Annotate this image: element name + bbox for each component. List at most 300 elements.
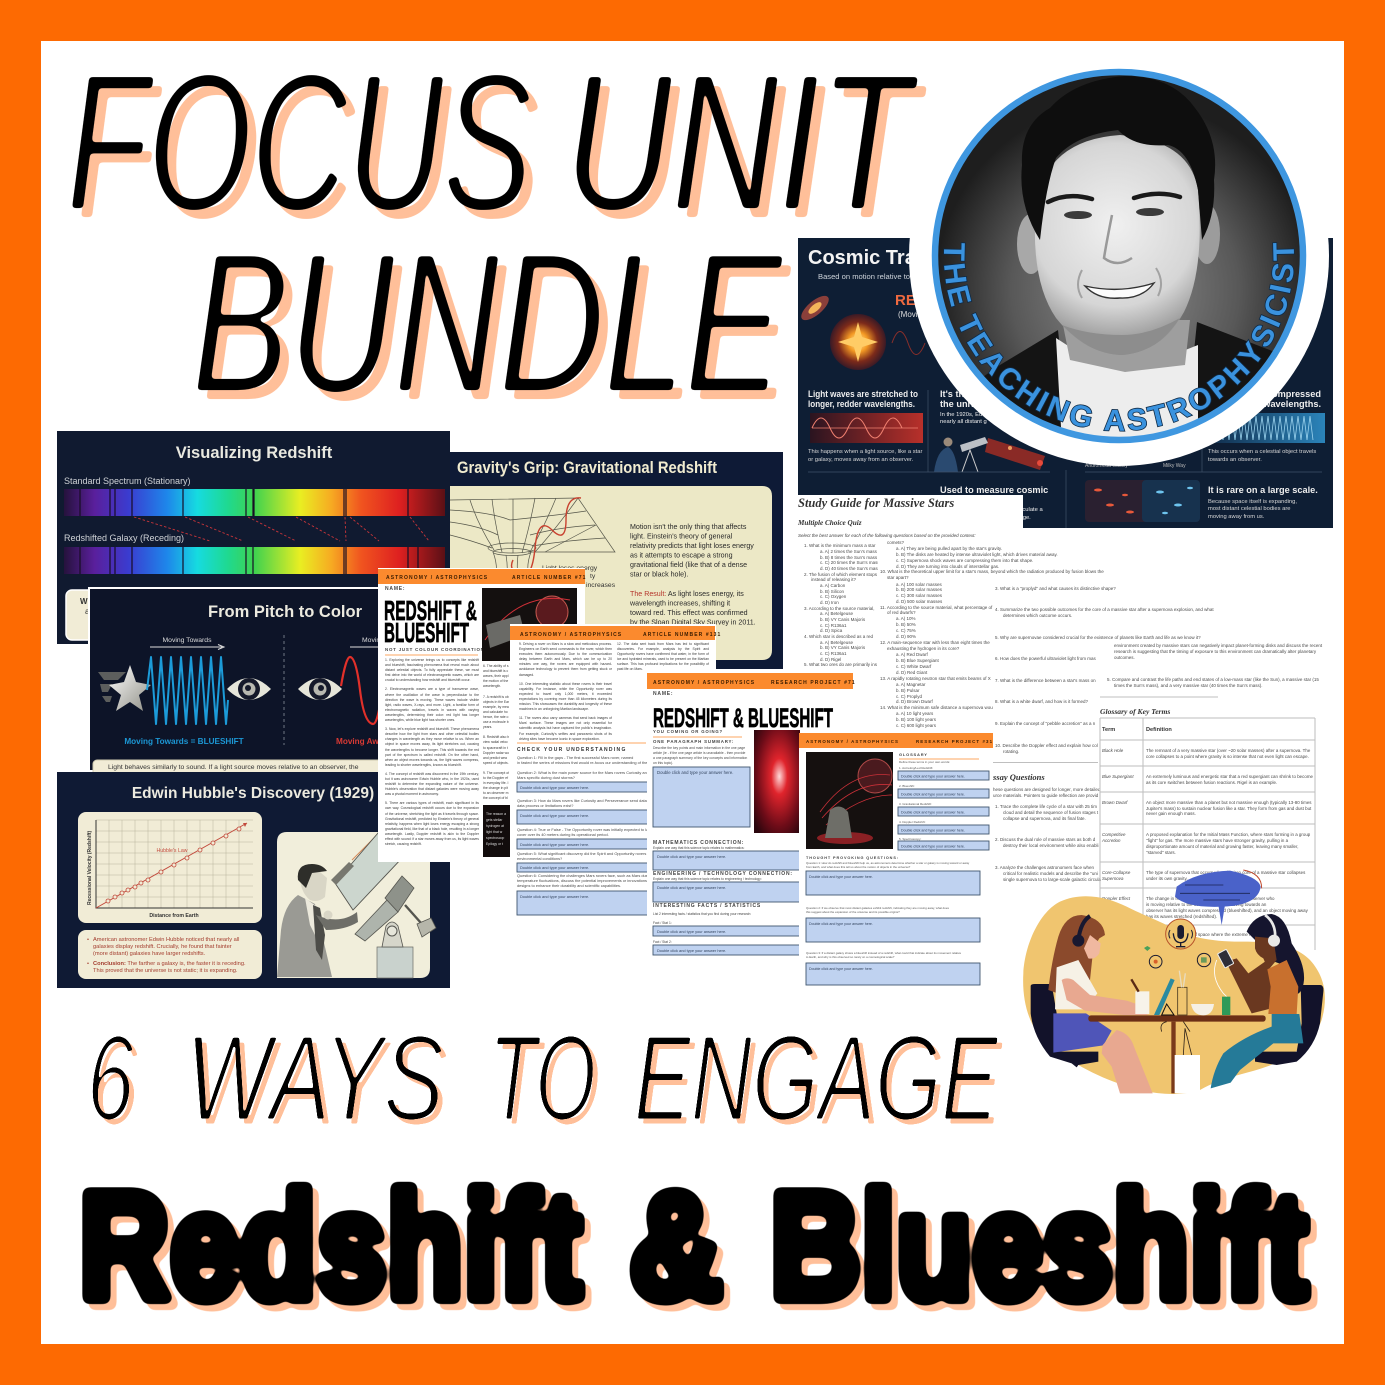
glossary answer boxes: Double click and type your answer here. bbox=[901, 792, 965, 796]
understanding questions: data process or limitations exist? bbox=[517, 803, 574, 808]
article text column 1: 9. Driving a rover on Mars is a slow and meticulous process. Engineers on Earth send commands to the rover, which then executes them autonomously. Due to the communication delay between Earth and Mars, which can be up to 20 minutes one way, the rovers are equipped with hazard-avoidance technology to prevent them from getting stuck or damaged. bbox=[519, 642, 612, 677]
quiz column 2: 11. According to the source material, what percentage of bbox=[880, 605, 993, 610]
understanding questions: Question 2: What is the main power source for the Mars rovers Curiosity and Perseverance and bbox=[517, 770, 682, 775]
illustration: two women listening to a podcast bbox=[1023, 870, 1325, 1094]
panel: study guide for massive stars bbox=[797, 495, 1323, 950]
gravity explanation text: Motion isn't the only thing that affects bbox=[630, 523, 747, 531]
funnel caption: ty bbox=[590, 573, 596, 580]
section: one paragraph summary: a one paragraph summary of the key concepts and information bbox=[653, 756, 747, 760]
thought questions: Question 1: How do redshift and blueshift help us, as astronomers determine whether a star or galaxy is moving toward or away bbox=[806, 861, 970, 865]
text: stretched waves: Light waves are stretched to bbox=[808, 389, 918, 399]
second text column: waves, their appl bbox=[483, 674, 508, 678]
answer boxes bbox=[517, 782, 652, 915]
text: it's the universe: In the 1920s, Ed bbox=[940, 412, 982, 418]
answer boxes: Double click and type your answer here. bbox=[520, 865, 589, 870]
heading: 6 ways to engage: WAYS bbox=[186, 1010, 444, 1146]
text: redshift occurs: or galaxy, moves away from an observer. bbox=[808, 457, 914, 463]
second text column: Doppler radar wo bbox=[483, 751, 509, 755]
page 2 continuation: times the Sun's mass), and a very massive star (40 times the Sun's mass). bbox=[1114, 683, 1263, 688]
chart: hubble's law bbox=[78, 812, 262, 923]
text: redshift occurs: This happens when a light source, like a star bbox=[808, 449, 922, 455]
short answer and essay column: 1. Trace the complete life cycle of a star with 25 tim bbox=[995, 804, 1097, 809]
heading: focus unit: UNIT bbox=[565, 33, 919, 252]
quiz column 2: star apart? bbox=[887, 575, 909, 580]
section: engineering connection: Explain one way that this science topic relates to engineering / technology: bbox=[653, 877, 762, 881]
orange header bbox=[799, 733, 993, 748]
icon: microphone bbox=[1166, 919, 1196, 949]
heading: 6 ways to engage: 6 bbox=[92, 1015, 139, 1151]
label: redshift column: REDSHIFT bbox=[895, 292, 970, 309]
understanding questions: Question 5: What significant discovery did the Spirit and Opportunity rovers make about Mars' bbox=[517, 851, 678, 856]
text: blueshift compressed bbox=[1191, 389, 1321, 409]
text: stretched waves: longer, redder wavelengths. bbox=[808, 399, 915, 409]
short answer and essay column: rotating. bbox=[1003, 749, 1019, 754]
thought questions: from Earth, and what does this tell us about the motion of objects in the universe? bbox=[806, 865, 911, 869]
shorts bbox=[1053, 1013, 1112, 1053]
understanding questions: temperature fluctuations, discuss the potential improvements or innovations that could be made in bbox=[517, 878, 685, 883]
heading: 6 ways to engage: TO bbox=[489, 1010, 596, 1146]
table and objects bbox=[1088, 971, 1266, 1093]
second text column: to the Doppler ef bbox=[483, 776, 508, 780]
answer boxes: Double click and type your answer here. bbox=[520, 813, 589, 818]
quiz column 1: b. B) VY Canis Majoris bbox=[820, 617, 866, 622]
quiz column 2: exhausting the hydrogen in its core? bbox=[887, 646, 960, 651]
short answer and essay column: 3. What is a "proplyd" and what causes its distinctive shape? bbox=[995, 586, 1116, 591]
thought questions: to Earth, and why is this observed so rarely on a cosmological scale? bbox=[806, 955, 895, 959]
understanding questions: Question 4: True or False - The Opportunity rover was initially expected to last 90 days but bbox=[517, 827, 673, 832]
nose bbox=[1104, 215, 1132, 263]
quiz column 2: d. D) Red Giant bbox=[896, 670, 928, 675]
quiz column 2: a. A) 100 solar masses bbox=[896, 582, 943, 587]
article text column 2: 12. The data sent back from Mars has led to significant discoveries. For example, analysis by the Spirit and Opportunity rovers have confirmed that water, in the form of ice and hydrated minerals, used to be present on the Martian surface. This has profound implications for the possibility of past life on Mars. bbox=[617, 642, 709, 671]
quiz column 2: b. B) Pulsar bbox=[896, 688, 920, 693]
label: redshifted galaxy: Redshifted Galaxy (Receding) bbox=[64, 533, 184, 543]
thought questions: Question 2: If we observe that most distant galaxies exhibit redshift, indicating they are moving away, what does bbox=[806, 906, 950, 910]
heading: focus unit: UNIT bbox=[574, 42, 928, 261]
text: it's the universe bbox=[940, 389, 987, 425]
understanding questions: environmental conditions? bbox=[517, 856, 563, 861]
glossary table: Black Hole bbox=[1102, 748, 1124, 753]
quiz column 2: b. B) Blue Supergiant bbox=[896, 658, 940, 663]
galaxy labels bbox=[1085, 463, 1186, 469]
hubble text card: (more distant) galaxies have larger redshifts. bbox=[93, 951, 206, 957]
section: interesting facts: List 2 interesting facts / statistics that you find during your research: bbox=[653, 912, 751, 916]
quiz column 1: c. C) Oxygen bbox=[820, 594, 847, 599]
second text column: wavelength. bbox=[483, 684, 501, 688]
glossary answer boxes: Double click and type your answer here. bbox=[901, 774, 965, 778]
subtitle: Based on motion relative to us bbox=[818, 272, 920, 281]
glossary table: disproportionate amount of material and growing faster, leaving many smaller, bbox=[1146, 844, 1298, 849]
second text column: objects in the Ear bbox=[483, 700, 509, 704]
label and arrow: moving towards bbox=[150, 637, 224, 650]
second text column: use a molecule b bbox=[483, 720, 509, 724]
heading: 6 ways to engage: TO bbox=[494, 1015, 601, 1151]
dark fact box: spectroscop bbox=[486, 836, 504, 840]
quiz column 2 cover bbox=[878, 538, 882, 738]
section: mathematics connection: Explain one way that this science topic relates to mathematics: bbox=[653, 846, 745, 850]
glossary answer boxes: Double click and type your answer here. bbox=[901, 810, 965, 814]
quiz column 1: c. C) 20 times the Sun's mass bbox=[820, 560, 880, 565]
orange rule bbox=[517, 742, 646, 744]
second text column: to spacecraft in t bbox=[483, 746, 508, 750]
heading: bundle: BUNDLE bbox=[192, 212, 784, 435]
spectrum: stationary bbox=[64, 489, 445, 516]
section: engineering connection: Double click and type your answer here. bbox=[657, 885, 726, 890]
orange header: RESEARCH PROJECT #31 bbox=[916, 739, 993, 744]
funnel caption: Light loses energy bbox=[542, 565, 598, 572]
quiz column 2: a. A) 10 light years bbox=[896, 711, 934, 716]
text: blueshift compressed: to shorter, bluer wavelengths. bbox=[1191, 399, 1321, 409]
hair bbox=[1048, 915, 1105, 997]
glossary table: Accretion bbox=[1101, 838, 1121, 843]
orange header: ARTICLE NUMBER #71 bbox=[512, 575, 587, 581]
label: moving away: Moving Away bbox=[362, 637, 403, 644]
section: one paragraph summary: Describe the key points and main information in the one page bbox=[653, 746, 745, 750]
glossary table: core collapses to a point where gravity is so intense that not even light can escape. bbox=[1146, 754, 1309, 759]
phone bbox=[1217, 949, 1234, 968]
worksheet title: REDSHIFT & bbox=[384, 595, 477, 626]
infographic title: Cosmic Traffic bbox=[808, 247, 946, 269]
heading: redshift and blueshift: & bbox=[629, 1161, 723, 1331]
second text column bbox=[483, 664, 509, 804]
heading: redshift and blueshift bbox=[79, 1161, 1314, 1337]
glossary heading: GLOSSARY bbox=[899, 752, 928, 757]
dark fact box: The reason a bbox=[486, 812, 506, 816]
worksheet: article number 71 bbox=[378, 568, 587, 862]
quiz column 1: a. A) Carbon bbox=[820, 583, 846, 588]
glossary table: "fight" for gas. The more massive stars have stronger gravity, pulling in a bbox=[1146, 838, 1289, 843]
text: rare on a large scale bbox=[1208, 485, 1318, 520]
label: standard spectrum: Standard Spectrum (Stationary) bbox=[64, 476, 191, 486]
answer boxes: Double click and type your answer here. bbox=[520, 842, 589, 847]
glossary table: The remnant of a very massive star (over ~20 solar masses) after a supernova. The bbox=[1146, 748, 1311, 753]
image: red light burst bbox=[754, 730, 800, 833]
text: used to measure cosmic bbox=[940, 485, 1048, 521]
article text column 1: 11. The rovers also carry cameras that send back images of Mars' surface. These images are not only essential for scientific analysis but have captured the public's imagination. For example, Curiosity's selfies and panoramic shots of its driving sites have become iconic in space exploration. bbox=[519, 716, 612, 741]
gravity explanation text bbox=[629, 523, 756, 626]
glossary table: is moving relative to the source. An object moving towards an bbox=[1146, 902, 1267, 907]
icon: galaxy bbox=[797, 292, 833, 324]
hubble text card: Conclusion: The farther a galaxy is, the faster it is receding. bbox=[93, 961, 246, 967]
gravity explanation text: light. Einstein's theory of general bbox=[630, 532, 733, 540]
woman on left bbox=[1048, 915, 1153, 1093]
orange header: ASTRONOMY / ASTROPHYSICS bbox=[806, 739, 899, 744]
hubble text card: galaxies display redshift. Crucially, he found that fainter bbox=[93, 944, 232, 950]
eyes bbox=[1064, 208, 1164, 219]
short answer and essay column: destroy their local environment while also enabli bbox=[1003, 843, 1099, 848]
worksheet title: BLUESHIFT bbox=[384, 617, 469, 648]
orange rule bbox=[653, 736, 742, 738]
glossary table: Core-Collapse bbox=[1102, 870, 1131, 875]
heading: bundle: BUNDLE bbox=[201, 221, 793, 444]
hubble text card bbox=[78, 930, 262, 979]
quiz column 1: b. B) VY Canis Majoris bbox=[820, 645, 866, 650]
short answer and essay column: 4. Summarize the two possible outcomes for the core of a massive star after a supernova explosion, and what bbox=[995, 607, 1214, 612]
second text column: 9. The concept of bbox=[483, 771, 509, 775]
hubble text card: • bbox=[87, 937, 89, 943]
label: moving away bbox=[350, 637, 403, 647]
icon: exploding star bbox=[830, 314, 886, 370]
glossary answer boxes: 2. Blueshift: bbox=[899, 784, 915, 788]
second text column: example, by mea bbox=[483, 705, 509, 709]
smile bbox=[1085, 283, 1154, 298]
understanding questions bbox=[517, 755, 685, 888]
quiz column 2: b. B) The disks are heated by intense ultraviolet light, which drives material away. bbox=[896, 552, 1058, 557]
heading: redshift and blueshift: & bbox=[635, 1167, 729, 1337]
blue ring bbox=[935, 72, 1303, 440]
face bbox=[1084, 935, 1101, 959]
section: one paragraph summary: ONE PARAGRAPH SUMMARY: bbox=[653, 739, 734, 744]
orange header bbox=[510, 626, 721, 640]
panel: gravity's grip slide bbox=[450, 452, 783, 669]
glossary table: Term bbox=[1102, 727, 1115, 733]
woman on right bbox=[1211, 914, 1304, 1088]
glossary answer boxes: 4. Doppler Redshift: bbox=[899, 820, 926, 824]
quiz column 1: c. C) R136a1 bbox=[820, 623, 847, 628]
worksheet: research project 31 bbox=[799, 733, 993, 992]
funnel caption: increases bbox=[586, 582, 616, 589]
short answer and essay column: 7. What is the difference between a star's mass on bbox=[995, 678, 1096, 683]
glossary table: Brown Dwarf bbox=[1102, 800, 1128, 805]
thought answer boxes: Double click and type your answer here. bbox=[809, 922, 873, 926]
heading: thought provoking questions: THOUGHT PROVOKING QUESTIONS: bbox=[806, 856, 899, 860]
illustration: hubble at telescope bbox=[277, 832, 436, 978]
label: redshift column bbox=[895, 292, 970, 319]
quiz column 2: c. C) White Dwarf bbox=[896, 664, 932, 669]
panel: visualizing redshift slide bbox=[57, 431, 450, 644]
curved name text: THE TEACHING ASTROPHYSICIST bbox=[943, 242, 1295, 432]
slide title: Visualizing Redshift bbox=[176, 444, 333, 462]
glossary table: under its own gravity. bbox=[1146, 876, 1188, 881]
heading: focus unit: FOCUS bbox=[76, 42, 541, 261]
text: rare on a large scale: It is rare on a large scale. bbox=[1208, 485, 1318, 495]
orange header bbox=[378, 569, 587, 584]
blue wave box bbox=[1215, 413, 1325, 443]
page 2 continuation bbox=[1107, 643, 1323, 688]
quiz column 2: of red dwarfs? bbox=[887, 610, 916, 615]
dashed divider bbox=[283, 635, 285, 745]
left chair bbox=[1031, 984, 1098, 1067]
short answer and essay column: 3. Analyze the challenges astronomers face when bbox=[995, 865, 1095, 870]
understanding questions: in fasted the series of missions that would re-focus our understanding of the red planet bbox=[517, 760, 667, 765]
understanding questions: Question 6: Considering the challenges Mars rovers face, such as Mars dust storms and extreme bbox=[517, 873, 684, 878]
glossary table: has its waves stretched (redshifted). bbox=[1146, 914, 1217, 919]
label: redshift column: (Moving Away) bbox=[898, 310, 951, 319]
page 2 continuation: 5. Compare and contrast the life paths and end states of a low-mass star (like the Sun), a massive star (15 bbox=[1107, 677, 1319, 682]
neck bbox=[1062, 320, 1190, 372]
quiz column 1: c. C) R136a1 bbox=[820, 651, 847, 656]
gravity explanation text: as it attempts to escape a strong bbox=[630, 552, 733, 560]
quiz column 2: a. A) Red Dwarf bbox=[896, 652, 929, 657]
quiz column 2: d. D) They are turning into clouds of interstellar gas. bbox=[896, 564, 999, 569]
gravity explanation text: gravitational field (like that of a dense bbox=[630, 561, 747, 569]
speech bubble bbox=[1175, 870, 1262, 925]
glossary table: Jupiter's mass) to sustain nuclear fusion like a star. They form from gas and dust but bbox=[1146, 806, 1312, 811]
section: engineering connection bbox=[653, 871, 803, 902]
second text column: view radial veloc bbox=[483, 740, 508, 744]
subheading: multiple choice quiz: Multiple Choice Quiz bbox=[797, 519, 862, 527]
article text column bbox=[385, 658, 479, 858]
second text column: to an observer m bbox=[483, 791, 508, 795]
dark fact box: Epilogy or t bbox=[486, 842, 503, 846]
worksheet subtitle: YOU COMING OR GOING? bbox=[653, 729, 723, 734]
hubble text card: This proved that the universe is not static; it is expanding. bbox=[93, 968, 238, 974]
heading: focus unit: FOCUS bbox=[67, 33, 532, 252]
teal jeans bbox=[1211, 1014, 1303, 1088]
icon: eye observer bbox=[298, 678, 342, 700]
glossary heading bbox=[899, 752, 979, 764]
glossary table: Doppler Effect bbox=[1102, 896, 1131, 901]
section: engineering connection: ENGINEERING / TECHNOLOGY CONNECTION: bbox=[653, 871, 793, 877]
gravity explanation text: star or black hole). bbox=[630, 570, 688, 578]
cheek lines bbox=[1078, 268, 1161, 298]
glossary table: The type of supernova that occurs when the iron core of a massive star collapses bbox=[1146, 870, 1306, 875]
ears bbox=[1017, 214, 1038, 274]
heading: redshift and blueshift: Redshift bbox=[79, 1161, 582, 1331]
gravity explanation text: toward red. This effect was confirmed bbox=[630, 609, 748, 617]
short answer and essay column: urce materials. Pointers to guide reflection are provid bbox=[993, 793, 1099, 798]
second text column: speed of objects. bbox=[483, 761, 509, 765]
section: interesting facts: Fact / Stat 2: bbox=[653, 940, 672, 944]
article text column: 2. Electromagnetic waves are a type of transverse wave, where the oscillation of the wave is perpendicular to the direction the wave is moving. These waves include visible light, radio waves, X-rays, and more. Light, a familiar form of electromagnetic radiation, travels in waves with varying wavelengths, determining their color: red light has longer wavelengths, while blue light has shorter ones. bbox=[385, 687, 479, 722]
quiz column 2: d. D) 90% bbox=[896, 634, 916, 639]
eyebrows bbox=[1048, 194, 1180, 202]
thought questions bbox=[806, 861, 970, 959]
article text column: 4. The concept of redshift was discovered in the 19th century, but it was astronomer Edwin Hubble who, in the 1920s, used redshift to determine the expanding nature of the universe. Hubble's observation that distant galaxies were moving away was a pivotal moment in astronomy. bbox=[385, 772, 479, 796]
article text column: 1. Exploring the universe brings us to concepts like redshift and blueshift, fascinating phenomena that reveal much about distant celestial objects. To fully appreciate these, we must first delve into the world of electromagnetic waves, which are crucial to understanding how redshift and blueshift occur. bbox=[385, 658, 479, 682]
text: rare on a large scale: most distant celestial bodies are bbox=[1208, 506, 1290, 512]
worksheet: research project 71 bbox=[647, 673, 856, 991]
text: redshift occurs bbox=[808, 449, 922, 463]
red light path bbox=[512, 498, 581, 576]
quiz column 1: d. D) Rigel bbox=[820, 657, 841, 662]
earphone cable bbox=[1214, 960, 1227, 997]
quiz column 1: 1. What is the minimum mass a star bbox=[804, 543, 876, 548]
text: blueshift occurs: This occurs when a celestial object travels bbox=[1208, 449, 1316, 455]
headphones bbox=[1078, 916, 1090, 940]
image: telescope and planet bbox=[806, 752, 893, 849]
glossary table: Habitable Zone, a zone of space where the extreme radiation from the bbox=[1146, 932, 1284, 937]
galaxy labels: Andromeda Galaxy bbox=[1085, 463, 1128, 469]
glossary table: Definition bbox=[1146, 727, 1172, 733]
icon: moving star bbox=[98, 665, 151, 711]
dark fact box: gets stellar bbox=[486, 818, 503, 822]
section: interesting facts bbox=[653, 903, 803, 955]
orange header: RESEARCH PROJECT #71 bbox=[771, 680, 856, 686]
page 2 continuation: research is suggesting that the timing of exposure to this environment can dramatically alter planetary bbox=[1114, 649, 1317, 654]
subheading: glossary of key terms: Glossary of Key Terms bbox=[1100, 707, 1170, 716]
section: one paragraph summary: on this topic). bbox=[653, 761, 673, 765]
arm bbox=[1062, 978, 1149, 1015]
worksheet subtitle: NOT JUST COLOUR COORDINATION bbox=[385, 647, 485, 652]
quiz column 1: b. B) Silicon bbox=[820, 589, 845, 594]
understanding questions: Question 3: How do Mars rovers like Curiosity and Perseverance send data back to Earth and bbox=[517, 798, 678, 803]
glossary answer boxes: 1. Accreting/Led Redshift: bbox=[899, 766, 933, 770]
short answer and essay column: 8. What is a white dwarf, and how is it formed? bbox=[995, 699, 1089, 704]
heading: 6 ways to engage: ENGAGE bbox=[634, 1010, 999, 1146]
text: it's the universe: It's the bbox=[940, 389, 969, 399]
text: it's the universe: nearly all distant g bbox=[940, 419, 987, 425]
quiz column 1: a. A) Betelgeuse bbox=[820, 611, 854, 616]
quiz column 1: a. A) Betelgeuse bbox=[820, 640, 854, 645]
quiz column 2: a. A) 10% bbox=[896, 616, 916, 621]
quiz column 2: c. C) 300 solar masses bbox=[896, 593, 943, 598]
glossary table: Blue Supergiant bbox=[1102, 774, 1134, 779]
dividers bbox=[808, 390, 1322, 528]
dark fact box: light that w bbox=[486, 830, 503, 834]
orange header: ASTRONOMY / ASTROPHYSICS bbox=[520, 632, 622, 638]
quiz column 1: instead of releasing it? bbox=[811, 577, 857, 582]
image: telescope and planet bbox=[482, 588, 577, 661]
slide title: Gravity's Grip: Gravitational Redshift bbox=[457, 458, 717, 477]
quiz column 2: d. D) 500 solar masses bbox=[896, 599, 943, 604]
glossary table: as its core switches between fusion reactions. Rigel is an example. bbox=[1146, 780, 1277, 785]
quiz column 2: c. C) Proplyd bbox=[896, 694, 923, 699]
orange header: ASTRONOMY / ASTROPHYSICS bbox=[386, 575, 488, 581]
section: interesting facts: Double click and type your answer here. bbox=[657, 929, 726, 934]
icon: eye bbox=[227, 678, 271, 700]
shirt bbox=[1056, 338, 1198, 445]
quiz column 2: a. A) They are being pulled apart by the star's gravity. bbox=[896, 546, 1002, 551]
quiz column 1: 5. What two ores do are primarily ins bbox=[804, 662, 878, 667]
glossary table: "starved" stars. bbox=[1146, 850, 1176, 855]
thought answer boxes bbox=[806, 871, 980, 985]
glossary heading: Define these terms in your own words: bbox=[899, 760, 950, 764]
page 2 continuation: outcomes. bbox=[1114, 655, 1135, 660]
glossary table: The change in frequency of a wave in relation to an observer who bbox=[1146, 896, 1275, 901]
thought questions: this suggest about the expansion of the universe and its possible origins? bbox=[806, 910, 900, 914]
quiz column 1: 2. The fusion of which element stops bbox=[804, 572, 878, 577]
answer boxes: Double click and type your answer here. bbox=[520, 785, 589, 790]
info box: Light behaves similarly to sound. If a light source moves relative to an observer, the bbox=[108, 764, 359, 771]
article text column: 5. There are various types of redshift, each significant in its own way. Cosmological redshift occurs due to the expansion of the universe, stretching the light as it travels through space. Gravitational redshift, predicted by Einstein's theory of general relativity, happens when light loses energy escaping a strong gravitational field, like that of a black hole, resulting in a longer wavelength. Lastly, Doppler redshift is akin to the Doppler effect with sound: if a star moves away from us, its light waves stretch, causing redshift. bbox=[385, 801, 479, 846]
quiz column 2: b. B) 50% bbox=[896, 622, 916, 627]
short answer and essay column: 10. Describe the Doppler effect and explain how col bbox=[995, 743, 1098, 748]
panel: edwin hubble's discovery slide bbox=[57, 772, 450, 988]
red wave box bbox=[810, 413, 923, 443]
leg bbox=[1102, 1030, 1153, 1093]
quiz column 2: c. C) Supernova shock waves are compressing them into that shape. bbox=[896, 558, 1033, 563]
spacetime funnel diagram bbox=[450, 498, 615, 600]
thought answer boxes: Double click and type your answer here. bbox=[809, 875, 873, 879]
slide title: Edwin Hubble's Discovery (1929) bbox=[132, 785, 374, 802]
name field: NAME: bbox=[385, 586, 405, 592]
quiz column 1: b. B) 8 times the Sun's mass bbox=[820, 555, 878, 560]
text: rare on a large scale: moving away from us. bbox=[1208, 514, 1265, 520]
quiz column 2: a. A) Magnetar bbox=[896, 682, 926, 687]
second text column: 6. The ability of s bbox=[483, 664, 509, 668]
glossary table: An extremely luminous and energetic star that a red supergiant can shrink to become bbox=[1146, 774, 1314, 779]
thought questions: Question 3: If a distant galaxy shows a blueshift instead of a redshift, what could that indicate about its movement relative bbox=[806, 951, 961, 955]
second text column: and blueshift is c bbox=[483, 669, 508, 673]
profile badge: the teaching astrophysicist bbox=[909, 68, 1329, 466]
second text column: 8. Redshift also h bbox=[483, 735, 509, 739]
quiz column 2 bbox=[880, 540, 1104, 728]
glossary answer boxes: Double click and type your answer here. bbox=[901, 844, 965, 848]
portrait photo bbox=[931, 68, 1310, 445]
study guide title: Study Guide for Massive Stars bbox=[798, 496, 954, 510]
quiz column 2: d. D) Brown Dwarf bbox=[896, 699, 934, 704]
glossary answer boxes: 5. Spectroscopy: bbox=[899, 837, 922, 841]
slide title: From Pitch to Color bbox=[208, 603, 363, 621]
short answer and essay column: cloud and detail the sequence of fusion stages t bbox=[1003, 810, 1099, 815]
glossary answer boxes: 3. Gravitational Redshift: bbox=[899, 802, 932, 806]
orange header bbox=[647, 673, 856, 689]
info box: a bbox=[85, 607, 90, 616]
funnel caption bbox=[542, 565, 616, 589]
understanding questions: designs to enhance their durability and scientific capabilities. bbox=[517, 883, 621, 888]
second text column: the motion of the bbox=[483, 679, 508, 683]
